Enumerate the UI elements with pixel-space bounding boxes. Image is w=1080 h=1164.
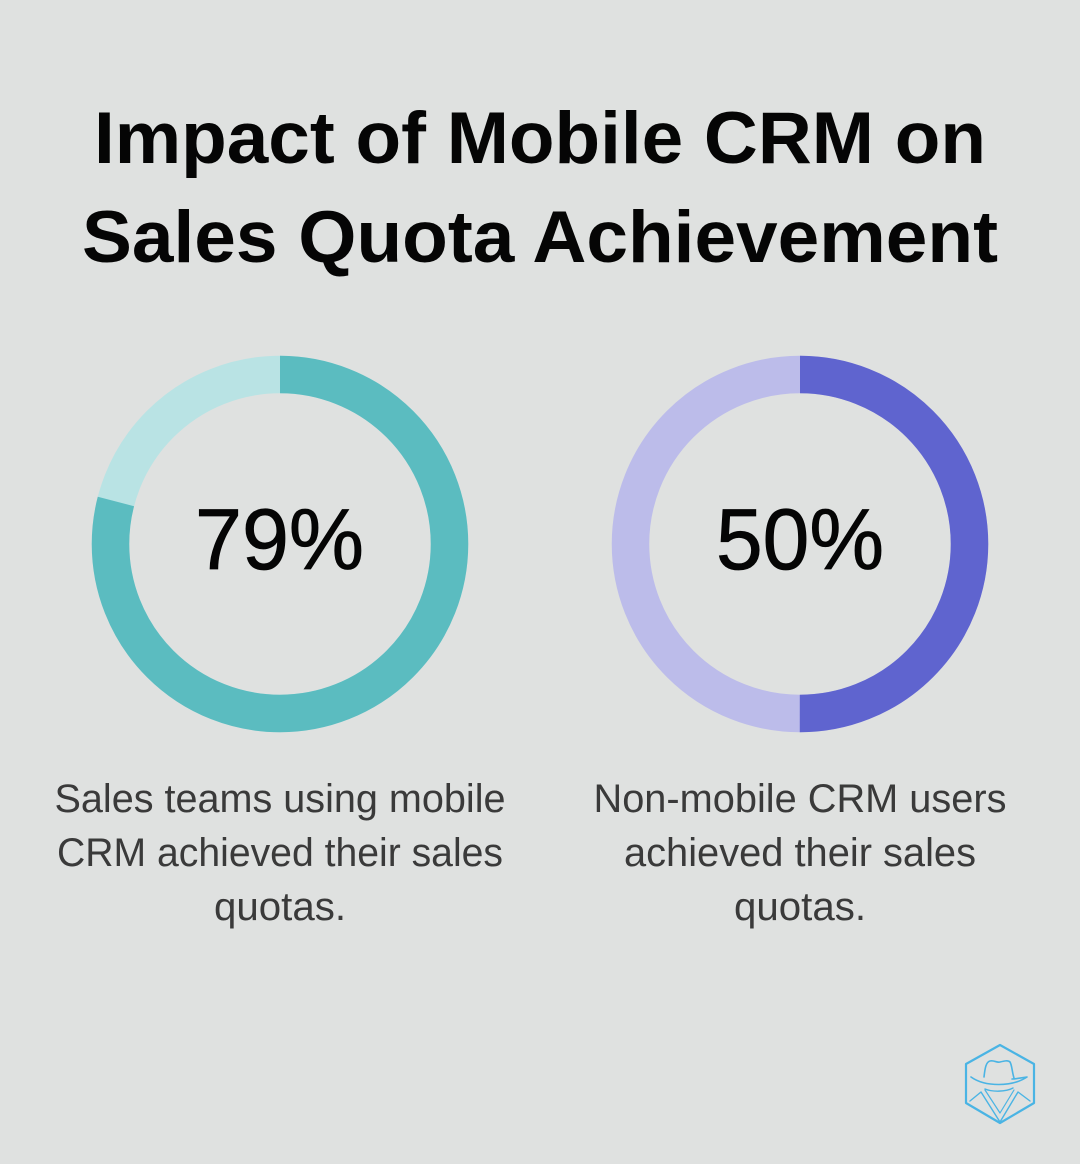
title (82, 98, 998, 278)
panel: mobile CRM users (54, 374, 506, 929)
panel: non-mobile CRM users (594, 374, 1006, 929)
description: non-mobile CRM users: quotas. (734, 885, 866, 929)
value: 79%: 79% (195, 492, 364, 588)
donut chart: 79% (110, 374, 450, 714)
icon: logo hexagon with hat and coat figure (966, 1045, 1034, 1123)
value: 50%: 50% (716, 492, 884, 588)
description: non-mobile CRM users (594, 777, 1006, 929)
description: mobile CRM users: quotas. (214, 885, 346, 929)
title: Sales Quota Achievement (82, 197, 998, 278)
description: mobile CRM users: Sales teams using mobile (54, 777, 506, 821)
description: non-mobile CRM users: Non-mobile CRM users (594, 777, 1006, 821)
description: non-mobile CRM users: achieved their sales (624, 831, 976, 875)
description: mobile CRM users (54, 777, 506, 929)
donut chart: 50% (630, 374, 970, 714)
description: mobile CRM users: CRM achieved their sales (57, 831, 503, 875)
title: Impact of Mobile CRM on (94, 98, 986, 179)
